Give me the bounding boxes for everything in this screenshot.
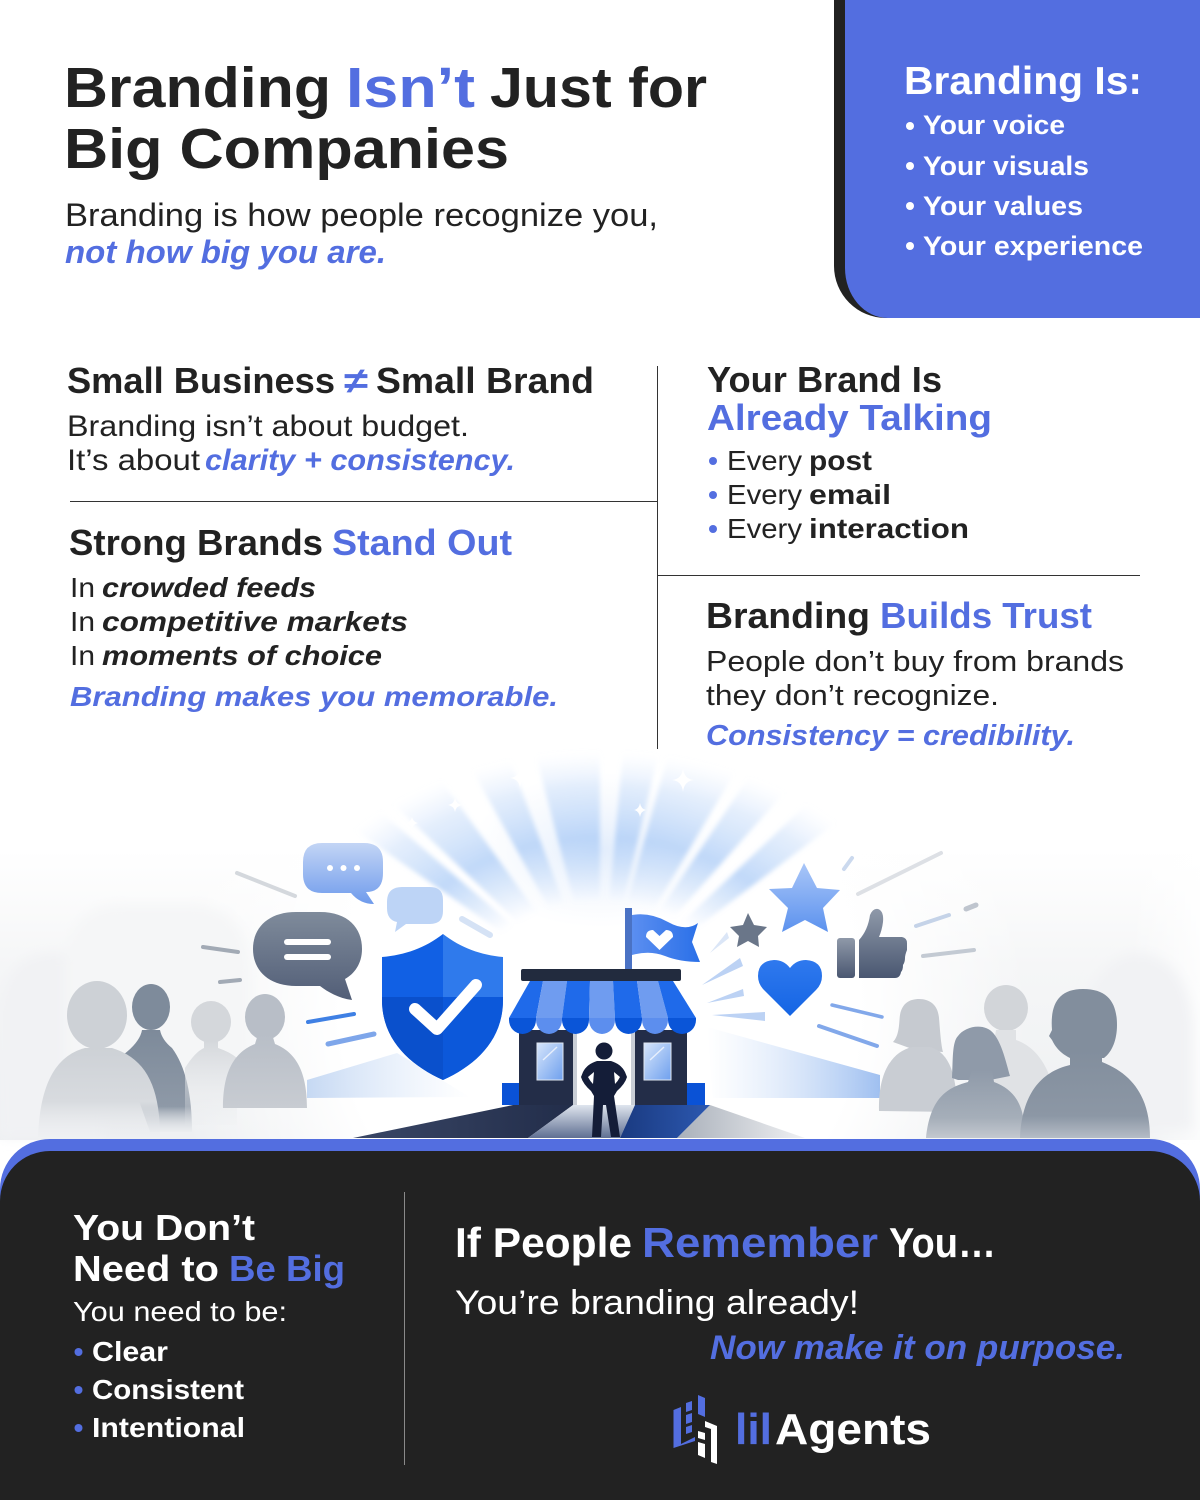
subtitle — [65, 197, 658, 270]
section: Your Brand Is Already Talking: Every — [727, 445, 802, 476]
section: Strong Brands Stand Out: competitive markets — [102, 606, 408, 637]
icon: shield with check — [382, 934, 503, 1080]
title — [64, 56, 707, 181]
footer panel — [0, 1139, 1200, 1500]
icon: speech bubble with lines — [253, 912, 362, 1000]
section: Branding Builds Trust: Builds Trust — [880, 595, 1092, 636]
section: Small Business, Small Brand: Small Brand — [376, 360, 594, 401]
section: Small Business, Small Brand: clarity + consistency. — [205, 444, 515, 477]
list: Branding Is items: Your values — [923, 191, 1083, 221]
list: Branding Is items: Your visuals — [923, 151, 1089, 181]
panel: Branding Is — [834, 0, 1200, 318]
motion streaks — [203, 853, 976, 1046]
store door opening — [570, 1033, 638, 1105]
list: Clear, Consistent, Intentional: Clear — [92, 1336, 168, 1367]
list: Branding Is items: Your experience — [923, 231, 1143, 261]
section: Small Business, Small Brand: Small Business — [67, 360, 335, 401]
icon: thumbs up — [837, 909, 907, 978]
section: Small Business, Small Brand — [67, 360, 594, 477]
section: Your Brand Is Already Talking — [707, 359, 992, 544]
store roof — [521, 969, 681, 981]
section: Your Brand Is Already Talking: email — [809, 479, 891, 510]
icon: small star — [730, 913, 767, 947]
list: Branding Is items: Your voice — [923, 110, 1065, 140]
icon: large star — [769, 863, 840, 932]
section: Small Business, Small Brand: Branding isn’t about budget. — [67, 410, 469, 443]
store radiating wedges — [702, 932, 765, 1021]
logo mark — [674, 1395, 717, 1464]
crowd: right — [879, 954, 1192, 1138]
list: Branding Is items — [906, 110, 1143, 261]
section: Your Brand Is Already Talking: Your Brand Is — [707, 359, 942, 400]
section: Strong Brands Stand Out: Strong Brands — [69, 522, 323, 563]
figure standing in front of store — [581, 1042, 627, 1137]
text: You're branding already: You’re branding already! — [455, 1284, 859, 1322]
heading: If People Remember You: If People — [455, 1219, 632, 1266]
section: Branding Builds Trust: Consistency = credibility. — [706, 720, 1075, 752]
logo: lilAgents — [674, 1395, 931, 1464]
section: Your Brand Is Already Talking: Every — [727, 513, 802, 544]
store walls — [519, 1030, 687, 1105]
title: Just for — [490, 56, 707, 120]
heading: Branding Is: Branding Is: — [904, 60, 1142, 103]
subtitle: Branding is how people recognize you, — [65, 197, 658, 233]
section: Branding Builds Trust: Branding — [706, 595, 870, 636]
section: Strong Brands Stand Out: Stand Out — [332, 522, 512, 563]
title: Branding — [64, 56, 331, 120]
list: Clear, Consistent, Intentional: Intentional — [92, 1412, 245, 1443]
heading: If People Remember You: Remember — [642, 1219, 878, 1266]
footer divider — [404, 1192, 406, 1465]
section: Strong Brands Stand Out: In — [70, 640, 95, 671]
heading: You Don't Need to Be Big: Be Big — [229, 1248, 345, 1289]
heading: You Don't Need to Be Big: Need to — [73, 1248, 219, 1289]
icon: small speech bubble — [387, 887, 443, 932]
section dividers — [70, 366, 1140, 749]
section: Your Brand Is Already Talking: interaction — [809, 513, 969, 544]
icon: speech bubble with dots — [303, 843, 383, 904]
store flag — [632, 914, 700, 962]
section: Branding Builds Trust: they don’t recognize. — [706, 680, 999, 712]
heading: You Don't Need to Be Big: You Don’t — [73, 1207, 255, 1248]
subtitle: not how big you are. — [65, 234, 386, 270]
ground path — [353, 1105, 805, 1138]
list: Clear, Consistent, Intentional: Consistent — [92, 1374, 244, 1405]
list: Clear, Consistent, Intentional — [74, 1336, 245, 1443]
section: Strong Brands Stand Out: In — [70, 572, 95, 603]
store base blocks — [502, 1083, 705, 1105]
section: Small Business, Small Brand: It’s about — [67, 444, 201, 477]
icon: storefront — [502, 908, 705, 1105]
title: Isn’t — [346, 56, 475, 120]
sparkles — [406, 768, 694, 829]
section: Strong Brands Stand Out: In — [70, 606, 95, 637]
icon: heart — [758, 960, 822, 1016]
section: Branding Builds Trust — [706, 595, 1124, 752]
heading: If People Remember You: You… — [889, 1219, 996, 1266]
section: Strong Brands Stand Out: crowded feeds — [102, 572, 316, 603]
section: Strong Brands Stand Out: Branding makes you memorable. — [70, 681, 558, 712]
heading: If People Remember You — [455, 1219, 996, 1266]
section: Your Brand Is Already Talking: Every — [727, 479, 802, 510]
crowd: left — [0, 905, 307, 1137]
store awning — [509, 981, 696, 1034]
section: Your Brand Is Already Talking: Already Talking — [707, 397, 992, 438]
section: Strong Brands Stand Out: moments of choice — [102, 640, 382, 671]
logo: lilAgents: lil — [735, 1405, 772, 1454]
section: Branding Builds Trust: People don’t buy from brands — [706, 646, 1124, 678]
callout: Now make it on purpose: Now make it on purpose. — [710, 1329, 1125, 1367]
store flag pole — [625, 908, 632, 970]
store windows — [537, 1043, 671, 1080]
section: Your Brand Is Already Talking: post — [809, 445, 872, 476]
section: Small Business, Small Brand: ≠ — [344, 360, 368, 401]
logo: lilAgents: Agents — [775, 1405, 931, 1454]
heading: You Don't Need to Be Big — [73, 1207, 345, 1289]
illustration background: haze and light rays — [0, 765, 1176, 1140]
title: Big Companies — [64, 117, 509, 181]
section: Strong Brands Stand Out — [69, 522, 558, 712]
text: You need to be: You need to be: — [73, 1296, 287, 1327]
